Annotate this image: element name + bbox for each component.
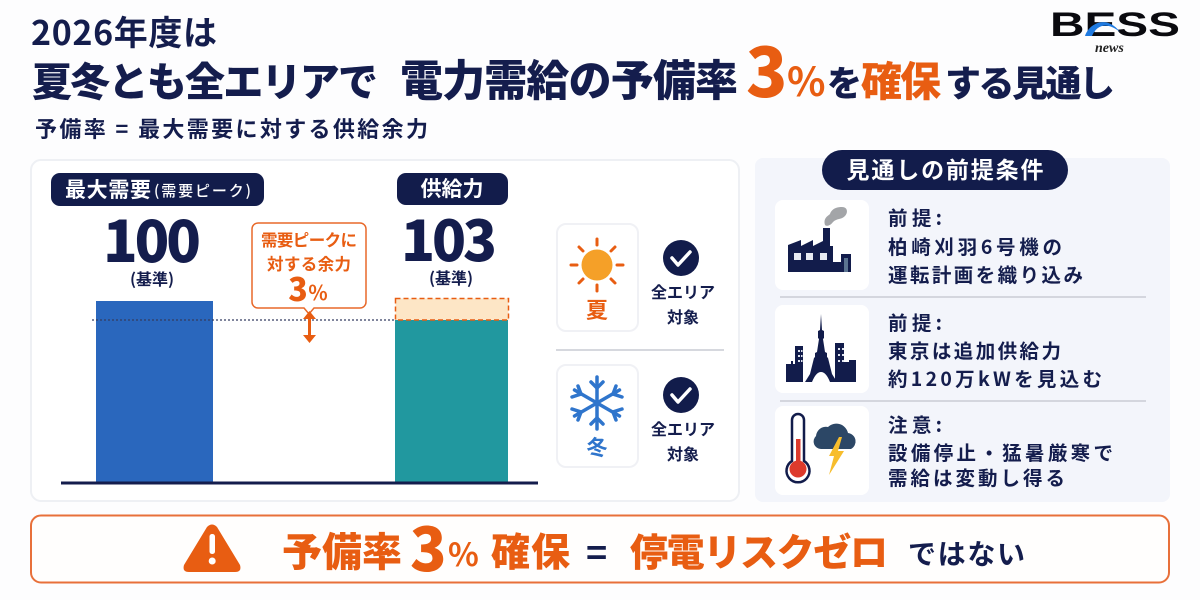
text: premise 2: [888, 307, 1102, 392]
logo: BESS news: [1050, 6, 1180, 56]
callout: warning banner: ではない: [908, 533, 1025, 573]
text: caution: [888, 409, 1113, 491]
callout: margin 3%: 3: [288, 265, 308, 311]
status: summer all areas: 全エリア: [651, 279, 715, 303]
text: caution: 注意:: [888, 409, 942, 438]
text: premise 1: 前提:: [888, 202, 942, 231]
callout: warning banner: [31, 502, 1169, 589]
icon: storm cloud: [814, 424, 856, 475]
text: premise 1: [888, 202, 1083, 288]
label: max demand: (需要ピーク): [154, 180, 251, 201]
logo: BESS news: BESS: [1050, 6, 1180, 44]
callout: warning banner: 確保: [491, 522, 570, 578]
value: demand 100: 100: [103, 197, 201, 279]
heading: assumptions: 見通しの前提条件: [846, 151, 1044, 185]
value: supply 103: (基準): [429, 265, 473, 289]
callout: margin 3%: %: [308, 277, 328, 306]
icon: warning triangle: [184, 524, 240, 572]
row: Kashiwazaki: [775, 200, 1083, 290]
callout: warning banner: %: [448, 530, 479, 576]
title: する見通し: [945, 55, 1115, 107]
card: winter: [557, 365, 638, 467]
text: premise 1: 柏崎刈羽6号機の: [888, 231, 1062, 260]
value: demand 100: (基準): [130, 266, 174, 290]
card: winter: 冬: [586, 432, 608, 462]
icon: tokyo skyline: [786, 314, 856, 382]
panel: assumptions: [755, 150, 1170, 502]
title: %: [787, 50, 826, 108]
status: summer all areas: [651, 240, 715, 328]
status: winter all areas: 対象: [667, 441, 699, 465]
label: max demand: 最大需要: [65, 174, 151, 204]
logo: BESS news: news: [1095, 41, 1124, 56]
text: premise 2: 前提:: [888, 307, 942, 336]
title: 2026年度は: [31, 6, 217, 55]
text: premise 2: 約120万kWを見込む: [888, 363, 1102, 392]
status: winter all areas: 全エリア: [651, 416, 715, 440]
title: 夏冬とも全エリアで: [32, 50, 378, 108]
label: max demand: [51, 173, 264, 206]
callout: warning banner: 予備率: [282, 520, 402, 578]
card: summer: 夏: [586, 293, 608, 325]
callout: warning banner: 3: [410, 502, 447, 589]
callout: warning banner: =: [586, 525, 607, 577]
row: caution: [775, 406, 1113, 495]
text: premise 1: 運転計画を織り込み: [888, 259, 1083, 288]
callout: margin 3%: 需要ピークに: [261, 227, 357, 251]
arrow: margin: [303, 311, 316, 343]
label: supply: [397, 173, 508, 205]
card: summer: [557, 224, 638, 331]
icon: thermometer: [787, 414, 810, 482]
title: 確保: [861, 48, 941, 108]
callout: margin 3%: 対する余力: [267, 251, 351, 275]
status: winter all areas: [651, 377, 715, 465]
panel: chart: [31, 160, 739, 501]
row: Tokyo: [775, 305, 1102, 393]
icon: factory: [788, 207, 851, 272]
text: caution: 設備停止・猛暑厳寒で: [888, 437, 1113, 466]
text: caution: 需給は変動し得る: [888, 462, 1065, 491]
title: 3: [746, 18, 787, 117]
bar: supply: [395, 298, 508, 482]
callout: warning banner: 停電リスクゼロ: [630, 522, 888, 577]
callout: margin 3%: [252, 223, 366, 314]
heading: assumptions: [822, 150, 1068, 190]
text: premise 2: 東京は追加供給力: [888, 335, 1061, 364]
icon: sun: [571, 239, 623, 291]
value: supply 103: 103: [401, 197, 497, 278]
title: を: [827, 56, 862, 107]
subtitle: definition: 予備率 = 最大需要に対する供給余力: [35, 112, 428, 144]
title: 電力需給の予備率: [400, 47, 738, 109]
status: summer all areas: 対象: [667, 304, 699, 328]
label: supply: 供給力: [420, 173, 484, 203]
bar: demand: [96, 301, 213, 482]
title: [31, 6, 1115, 117]
icon: snowflake: [572, 377, 622, 429]
